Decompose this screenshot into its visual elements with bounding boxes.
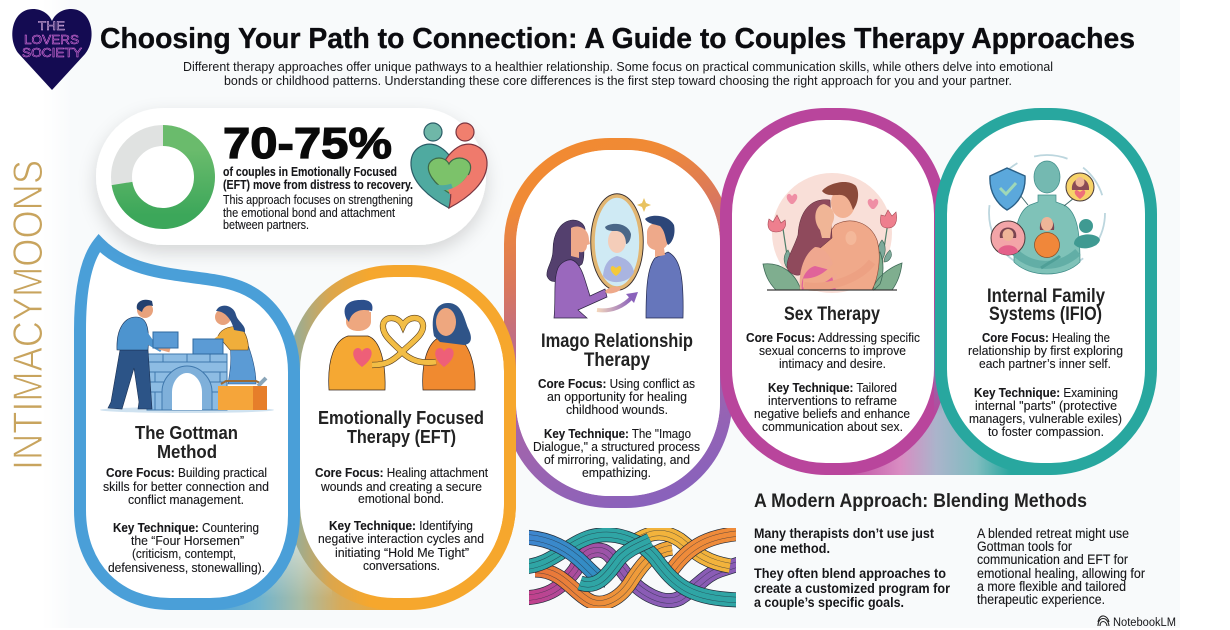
core focus text: sexual concerns to improve (759, 343, 906, 358)
right column text: therapeutic experience. (977, 592, 1105, 607)
big number: 70-75% (223, 119, 392, 168)
title: Choosing Your Path to Connection: A Guide to Couples Therapy Approaches (100, 23, 1135, 55)
left column text (754, 526, 951, 610)
core focus text (968, 330, 1123, 371)
right column text: A blended retreat might use (977, 526, 1129, 541)
core focus text: Core Focus: Addressing specific (746, 330, 920, 345)
panel: The Gottman Method (80, 243, 294, 604)
panel: Imago Relationship Therapy (495, 138, 731, 568)
donut chart (122, 136, 204, 218)
heading: The Gottman (135, 423, 238, 443)
intro text: Different therapy approaches offer unique pathways to a healthier relationship. Some focus on practical communication skills, while others delve into emotional (183, 59, 1053, 74)
panel: Internal Family Systems (941, 114, 1151, 469)
logo: The Lovers Society heart: LOVERS (24, 33, 79, 47)
core focus text: an opportunity for healing (547, 389, 687, 404)
stat caption: of couples in Emotionally Focused (223, 165, 397, 179)
key technique text: Key Technique: Identifying (329, 519, 473, 533)
key technique text: Dialogue," a structured process (533, 439, 700, 454)
core focus text: skills for better connection and (103, 480, 269, 494)
heading (135, 423, 238, 462)
key technique text: communication about sex. (762, 419, 903, 434)
heading: A Modern Approach: Blending Methods (754, 490, 1087, 512)
key technique text (318, 519, 484, 573)
key technique text (754, 380, 910, 434)
left column text: They often blend approaches to (754, 566, 946, 581)
heading: Systems (IFIO) (989, 303, 1102, 325)
key technique text: negative beliefs and enhance (754, 406, 910, 421)
right column text: a more flexible and tailored (977, 579, 1126, 594)
key technique text: Key Technique: Tailored (768, 380, 897, 395)
key technique text: Key Technique: The "Imago (544, 426, 691, 441)
panel: Emotionally Focused Therapy (294, 271, 510, 604)
left column text: create a customized program for (754, 581, 951, 596)
connector wash: Gottman to EFT (200, 520, 394, 610)
left column text: a couple’s specific goals. (754, 595, 904, 610)
right column text (977, 526, 1146, 607)
heading: Internal Family (987, 285, 1105, 307)
key technique text: empathizing. (582, 465, 651, 480)
heading: Therapy (584, 349, 650, 371)
heading (987, 285, 1105, 325)
key technique text (108, 521, 265, 575)
heading: Method (157, 442, 217, 462)
key technique text: managers, vulnerable exiles) (969, 411, 1122, 426)
icon: inner parts figure (989, 155, 1105, 274)
right column text: communication and EFT for (977, 552, 1128, 567)
key technique text: (criticism, contempt, (132, 547, 236, 561)
core focus text: each partner’s inner self. (979, 356, 1111, 371)
heading: Emotionally Focused (318, 408, 484, 428)
stat caption: the emotional bond and attachment (223, 206, 395, 220)
core focus text: conflict management. (128, 493, 244, 507)
icon: couple building a brick arch (100, 300, 274, 413)
key technique text: to foster compassion. (988, 424, 1104, 439)
key technique text: Key Technique: Countering (113, 521, 259, 535)
key technique text: defensiveness, stonewalling). (108, 561, 265, 575)
core focus text (538, 376, 695, 417)
key technique text: negative interaction cycles and (318, 532, 484, 546)
core focus text: Core Focus: Healing attachment (315, 466, 488, 480)
stat caption: This approach focuses on strengthening (223, 193, 413, 207)
right column text: emotional healing, allowing for (977, 566, 1146, 581)
right column text: Gottman tools for (977, 539, 1072, 554)
stat caption: (EFT) move from distress to recovery. (223, 178, 413, 192)
NotebookLM badge: NotebookLM (1113, 617, 1176, 629)
core focus text: intimacy and desire. (779, 356, 886, 371)
left column text: one method. (754, 541, 830, 556)
key technique text: internal "parts" (protective (975, 398, 1117, 413)
logo: The Lovers Society heart: SOCIETY (22, 46, 83, 60)
braided strands illustration (520, 533, 745, 603)
core focus text (315, 466, 488, 506)
core focus text: emotional bond. (358, 492, 444, 506)
intro text (183, 59, 1053, 88)
heading: Imago Relationship (541, 330, 693, 352)
section: blending methods (754, 490, 1146, 610)
core focus text (103, 466, 269, 507)
key technique text: initiating “Hold Me Tight” (335, 546, 469, 560)
key technique text: of mirroring, validating, and (544, 452, 690, 467)
brand wordmark: Intimacymoons: INTIMACYMOONS (4, 160, 51, 470)
key technique text: the “Four Horsemen” (131, 534, 244, 548)
left column text: Many therapists don’t use just (754, 526, 934, 541)
key technique text: Key Technique: Examining (974, 385, 1118, 400)
stat caption (223, 165, 413, 232)
heading (318, 408, 484, 447)
core focus text (746, 330, 920, 371)
stat caption: between partners. (223, 218, 309, 232)
logo: The Lovers Society heart (12, 9, 92, 90)
core focus text: childhood wounds. (566, 402, 668, 417)
icon: couple at a mirror (547, 196, 683, 318)
icon: embracing couple with flowers (763, 173, 902, 293)
key technique text: conversations. (363, 559, 440, 573)
icon: embracing figures forming a heart (411, 123, 487, 208)
heading (541, 330, 693, 371)
logo: The Lovers Society heart: THE (38, 19, 65, 33)
heading: Therapy (EFT) (347, 427, 456, 447)
stat panel: 70-75% (96, 108, 487, 245)
core focus text: Core Focus: Using conflict as (538, 376, 695, 391)
heading: Sex Therapy (784, 303, 880, 325)
core focus text: Core Focus: Building practical (106, 466, 267, 480)
icon: couple linked by heart ribbon (329, 300, 475, 390)
key technique text: interventions to reframe (768, 393, 897, 408)
key technique text (533, 426, 700, 480)
key technique text (969, 385, 1122, 439)
core focus text: relationship by first exploring (968, 343, 1123, 358)
core focus text: wounds and creating a secure (320, 480, 482, 494)
panel: Sex Therapy (726, 114, 942, 469)
core focus text: Core Focus: Healing the (982, 330, 1110, 345)
intro text: bonds or childhood patterns. Understanding these core differences is the first step toward choosing the right approach for you and your partner. (224, 73, 1012, 88)
connector wash: Sex Therapy to IFS (840, 380, 1041, 475)
